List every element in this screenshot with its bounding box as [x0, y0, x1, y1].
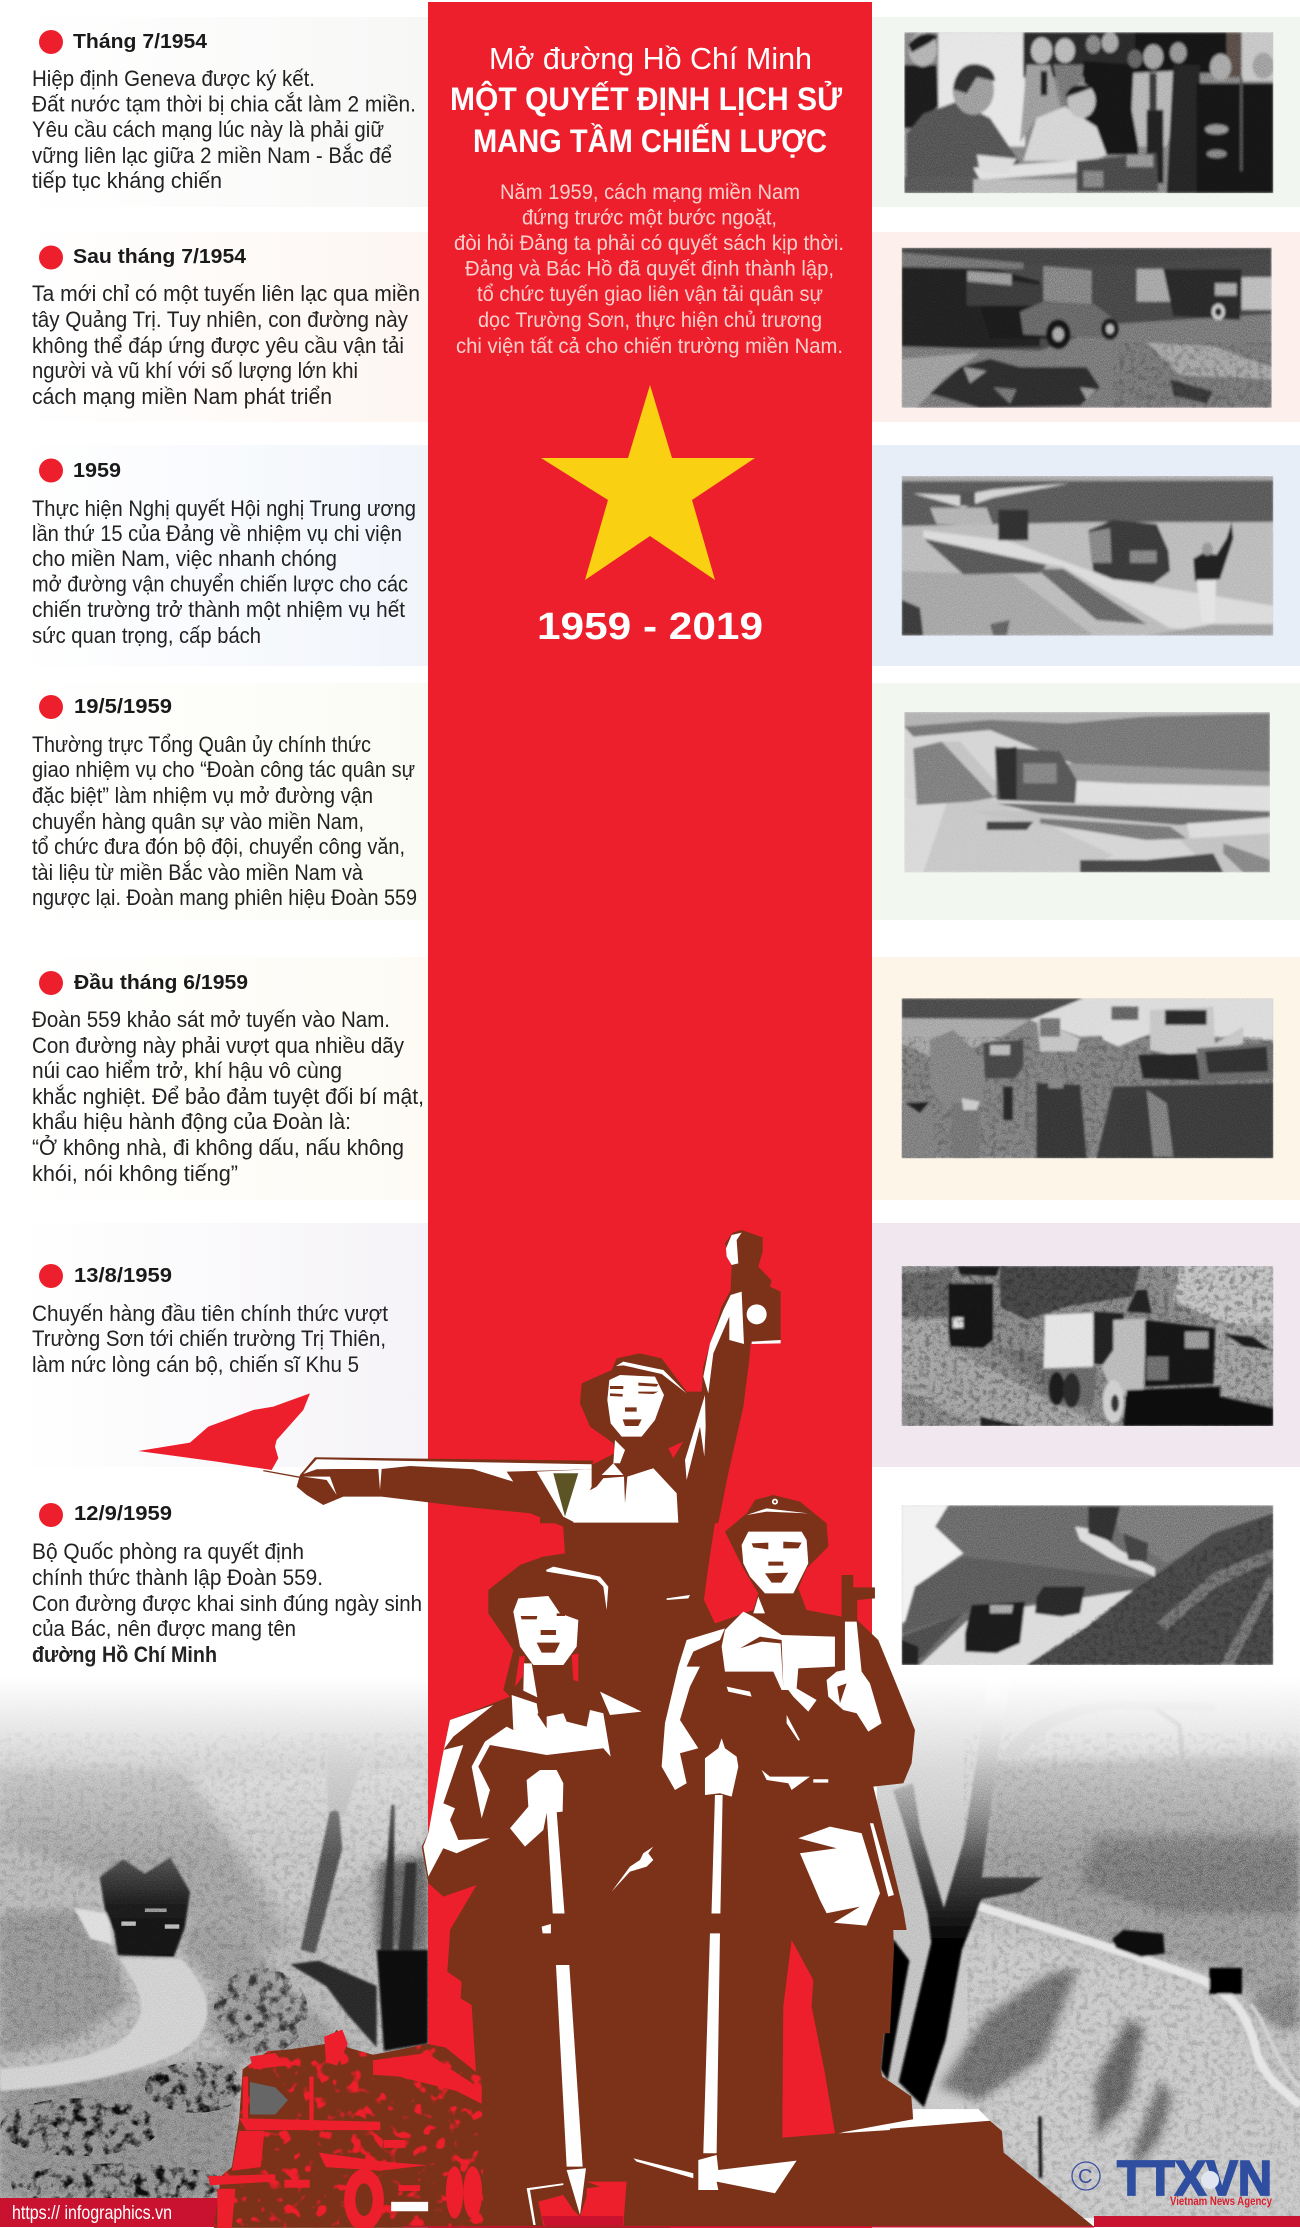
timeline: 1959: mở đường vận chuyển chiến lược cho các	[32, 572, 408, 596]
timeline: Sau tháng 7/1954: không thể đáp ứng được yêu cầu vận tải	[32, 333, 404, 358]
timeline: 19/5/1959: ngược lại. Đoàn mang phiên hiệu Đoàn 559	[32, 885, 417, 910]
photo: trucks on road	[902, 248, 1272, 408]
timeline: 19/5/1959: tổ chức đưa đón bộ đội, chuyển công văn,	[32, 834, 405, 859]
intro paragraph	[454, 181, 844, 358]
timeline: Đầu tháng 6/1959: Đầu tháng 6/1959	[74, 972, 248, 994]
timeline: Sau tháng 7/1954: Sau tháng 7/1954	[73, 246, 247, 268]
timeline: Sau tháng 7/1954: cách mạng miền Nam phát triển	[32, 384, 332, 409]
timeline: 1959: 1959	[73, 460, 121, 482]
logo: TTXVN: C	[1078, 2166, 1092, 2188]
photo: bulldozers and workers	[902, 998, 1273, 1158]
timeline: 12/9/1959: Con đường được khai sinh đúng ngày sinh	[32, 1591, 422, 1616]
intro paragraph: tổ chức tuyến giao liên vận tải quân sự	[477, 283, 823, 306]
timeline: 1959: cho miền Nam, việc nhanh chóng	[32, 546, 337, 571]
timeline: 19/5/1959: Thường trực Tổng Quân ủy chính thức	[32, 732, 371, 757]
timeline: 1959: Thực hiện Nghị quyết Hội nghị Trung ương	[32, 496, 416, 521]
timeline: Tháng 7/1954: Yêu cầu cách mạng lúc này là phải giữ	[32, 117, 384, 142]
photo: truck convoy on winding road	[902, 1505, 1273, 1665]
timeline: 13/8/1959	[32, 1264, 388, 1377]
source url: https:// infographics.vn	[12, 2202, 172, 2224]
photo: truck crossing pontoon	[904, 712, 1270, 872]
timeline: 19/5/1959: 19/5/1959	[74, 696, 172, 718]
timeline: 1959: chiến trường trở thành một nhiệm vụ hết	[32, 597, 405, 622]
title: MỘT QUYẾT ĐỊNH LỊCH SỬ	[450, 81, 842, 117]
timeline: 13/8/1959: làm nức lòng cán bộ, chiến sĩ Khu 5	[32, 1352, 359, 1377]
timeline: 19/5/1959: tài liệu từ miền Bắc vào miền Nam và	[32, 860, 364, 885]
background panels	[20, 17, 1300, 1467]
timeline: 13/8/1959: Chuyến hàng đầu tiên chính thức vượt	[32, 1301, 388, 1326]
timeline: Đầu tháng 6/1959: núi cao hiểm trở, khí hậu vô cùng	[32, 1058, 342, 1083]
timeline: Đầu tháng 6/1959: “Ở không nhà, đi không dấu, nấu không	[32, 1135, 404, 1160]
bottom edge line	[403, 2226, 1094, 2228]
timeline: Đầu tháng 6/1959: khẩu hiệu hành động của Đoàn là:	[32, 1109, 351, 1134]
timeline: 19/5/1959	[32, 695, 417, 910]
year range: 1959 - 2019	[537, 606, 763, 648]
left landscape photo	[0, 1650, 428, 2225]
flag	[138, 1393, 310, 1477]
intro paragraph: Năm 1959, cách mạng miền Nam	[500, 181, 800, 204]
timeline: Tháng 7/1954: tiếp tục kháng chiến	[32, 168, 222, 193]
timeline: 1959	[32, 458, 416, 648]
timeline: Sau tháng 7/1954	[32, 246, 420, 409]
timeline: 12/9/1959: của Bác, nên được mang tên	[32, 1616, 296, 1641]
figure: left lower body	[447, 1933, 670, 2228]
timeline: Đầu tháng 6/1959: khói, nói không tiếng”	[32, 1161, 238, 1186]
timeline: Tháng 7/1954: Tháng 7/1954	[73, 31, 208, 53]
timeline: 12/9/1959: chính thức thành lập Đoàn 559.	[32, 1565, 323, 1590]
timeline: 12/9/1959	[32, 1503, 422, 1667]
logo: TTXVN: Vietnam News Agency	[1170, 2196, 1273, 2208]
timeline: Tháng 7/1954: Hiệp định Geneva được ký kết.	[32, 66, 315, 91]
figure: outstretched arm	[297, 1457, 593, 1527]
timeline: Tháng 7/1954: Đất nước tạm thời bị chia cắt làm 2 miền.	[32, 92, 416, 117]
timeline: Sau tháng 7/1954: Ta mới chỉ có một tuyến liên lạc qua miền	[32, 281, 420, 306]
timeline: 13/8/1959: 13/8/1959	[74, 1265, 172, 1287]
title: Mở đường Hồ Chí Minh	[489, 41, 812, 76]
timeline: Đầu tháng 6/1959: Đoàn 559 khảo sát mở tuyến vào Nam.	[32, 1007, 390, 1032]
timeline: 12/9/1959: đường Hồ Chí Minh	[32, 1642, 217, 1667]
photo: six-wheel truck on mountain	[902, 1266, 1273, 1426]
icon: red and brown truck	[208, 2029, 484, 2228]
central red column	[428, 2, 872, 2228]
intro paragraph: Đảng và Bác Hồ đã quyết định thành lập,	[465, 258, 834, 280]
intro paragraph: đứng trước một bước ngoặt,	[522, 206, 777, 230]
timeline: 12/9/1959: 12/9/1959	[74, 1503, 172, 1525]
logo: TTXVN: TTXVN	[1117, 2152, 1272, 2206]
timeline: 19/5/1959: giao nhiệm vụ cho “Đoàn công tác quân sự	[32, 757, 415, 782]
intro paragraph: dọc Trường Sơn, thực hiện chủ trương	[478, 309, 822, 332]
intro paragraph: chi viện tất cả cho chiến trường miền Nam.	[456, 335, 843, 358]
timeline: 19/5/1959: đặc biệt” làm nhiệm vụ mở đường vận	[32, 783, 373, 808]
photo: Geneva signing	[904, 32, 1274, 193]
timeline: Sau tháng 7/1954: người và vũ khí với số lượng lớn khi	[32, 358, 358, 383]
figure: front woman and soldier silhouette	[422, 1490, 915, 2033]
timeline: Đầu tháng 6/1959: Con đường này phải vượt qua nhiều dãy	[32, 1033, 404, 1058]
right landscape photo	[872, 1650, 1300, 2218]
figure: back woman raising lantern	[540, 1230, 781, 1523]
timeline: 1959: sức quan trọng, cấp bách	[32, 623, 261, 648]
timeline: Tháng 7/1954: vững liên lạc giữa 2 miền Nam - Bắc để	[32, 143, 392, 168]
bottom strips	[0, 2198, 1300, 2227]
figure: lower body and stone base	[551, 1914, 1094, 2227]
timeline: 12/9/1959: Bộ Quốc phòng ra quyết định	[32, 1539, 304, 1564]
title	[450, 41, 842, 159]
icon: yellow star	[541, 385, 755, 580]
title: MANG TẦM CHIẾN LƯỢC	[473, 123, 827, 159]
illustration: three workers	[138, 1230, 1094, 2228]
timeline: 19/5/1959: chuyển hàng quân sự vào miền Nam,	[32, 809, 364, 834]
timeline: 13/8/1959: Trường Sơn tới chiến trường Trị Thiên,	[32, 1326, 386, 1351]
photo: pontoon bridge with tanker truck	[902, 476, 1273, 636]
timeline: Đầu tháng 6/1959	[32, 971, 424, 1186]
intro paragraph: đòi hỏi Đảng ta phải có quyết sách kịp thời.	[454, 232, 844, 255]
timeline: Sau tháng 7/1954: tây Quảng Trị. Tuy nhiên, con đường này	[32, 307, 408, 332]
timeline: 1959: lần thứ 15 của Đảng về nhiệm vụ chi viện	[32, 521, 402, 546]
timeline: Đầu tháng 6/1959: khắc nghiệt. Để bảo đảm tuyệt đối bí mật,	[32, 1084, 424, 1109]
timeline: Tháng 7/1954	[32, 30, 416, 193]
shovel and pickaxe	[527, 1933, 890, 2226]
